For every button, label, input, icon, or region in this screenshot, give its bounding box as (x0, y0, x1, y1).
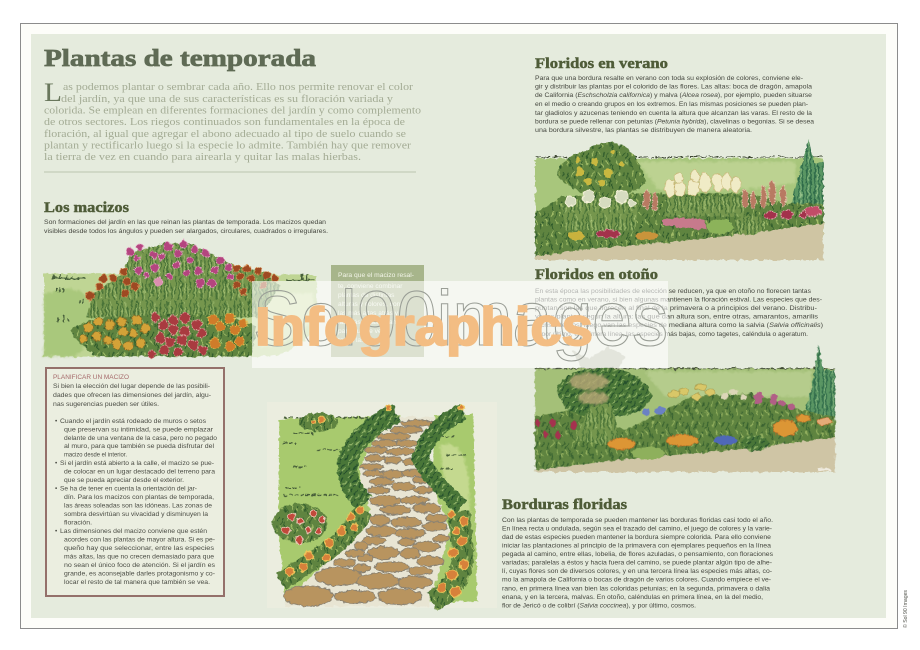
text: Borduras floridas: variadas; paralelas a éstos y hacia fuera del camino, se puede plantar algún tipo de alhe- (502, 560, 772, 566)
box: Planificar un macizo: dín. Para los macizos con plantas de temporada, (64, 494, 214, 501)
illustration: stone path (273, 405, 477, 606)
callout: green note: todas las flores. (338, 337, 384, 344)
heading: Floridos en otoño: Floridos en otoño (535, 267, 658, 283)
text: Borduras floridas: iniciar las plantaciones al principio de la primavera con ejemplares pequeños en la línea (502, 542, 771, 550)
intro text block: as podemos plantar o sembrar cada año. Ello nos permite renovar el color (63, 82, 414, 93)
callout: green note: para que se vean (338, 328, 389, 335)
callout: green note: Para que el macizo resal- (338, 272, 414, 279)
callout: green note (331, 265, 424, 357)
illustration: autumn border (535, 345, 835, 472)
text: Floridos en verano: bordura se puede rellenar con petunias ( Petunia hybrida), clavelinas o begonias. Si se desea (535, 118, 814, 126)
text: Borduras floridas: pegada al camino, entre ellas, lobelia, de flores azuladas, o pensamiento, con floraciones (502, 551, 774, 558)
watermark: Sol90images (253, 274, 668, 362)
box: Planificar un macizo: Las dimensiones del macizo conviene que estén (60, 528, 207, 535)
text: Floridos en verano: Para que una bordura resalte en verano con toda su explosión de colores, conviene ele- (535, 75, 803, 82)
box: Planificar un macizo: Se ha de tener en cuenta la orientación del jar- (60, 486, 197, 492)
text: Floridos en otoño: y crisantemos; luego van las especies de mediana altura como la salvia ( Salvia officinalis ) (535, 322, 823, 329)
intro text block: floración, al igual que agregar el abono adecuado al tipo de suelo cuando se (44, 129, 406, 140)
box: Planificar un macizo: nas sugerencias pueden ser útiles. (53, 401, 159, 408)
text: Floridos en verano: una bordura silvestre, las plantas se distribuyen de manera aleatoria. (535, 127, 752, 134)
intro text block: colorida. Se emplean en diferentes formaciones del jardín y como complemento (44, 106, 421, 116)
box: Planificar un macizo: no sean el único foco de atención. Si el jardín es (64, 562, 215, 569)
heading: Floridos en verano: Floridos en verano (535, 56, 668, 72)
intro text block: la tierra de vez en cuando para airearla y quitar las malas hierbas. (44, 152, 361, 163)
text: Los macizos (44, 219, 328, 235)
box: Planificar un macizo (46, 368, 224, 596)
box: Planificar un macizo: • (55, 418, 57, 425)
intro text block: del jardín, ya que una de sus características es su floración variada y (61, 94, 394, 105)
box: Planificar un macizo: locar el resto de tal manera que también se vea. (64, 579, 210, 586)
box: Planificar un macizo: las áreas soleadas son las idóneas. Las zonas de (64, 502, 212, 510)
intro text block: de otros sectores. Los riegos continuados son fundamentales en la época de (44, 117, 405, 128)
text: Floridos en otoño: ye las plantas según la altura: las que dan altura son, entre otras, amarantos, amarilis (535, 314, 819, 320)
box: Planificar un macizo: al muro, para que también se pueda disfrutar del (64, 443, 214, 450)
box: Planificar un macizo: floración. (64, 520, 92, 526)
drop cap: L (44, 78, 62, 107)
box heading: PLANIFICAR UN MACIZO (53, 374, 129, 381)
text: Floridos en otoño (535, 288, 823, 338)
text: Los macizos: Son formaciones del jardín en las que reinan las plantas de temporada. Los macizos quedan (44, 219, 326, 226)
illustration: flower bed (44, 240, 317, 358)
illustration: summer border (535, 138, 823, 260)
callout: green note: las más bajas delante (338, 319, 402, 326)
text: Floridos en verano: tar gladiolos y azucenas teniendo en cuenta la altura que alcanzan las varas. El resto de la (535, 110, 812, 117)
intro text block (44, 78, 421, 163)
text: Floridos en otoño: En esta época las posibilidades de elección se reducen, ya que en otoño no florecen tantas (535, 288, 812, 295)
box: Planificar un macizo: queño hay que seleccionar, entre las especies (64, 545, 214, 552)
text: Borduras floridas: enana, y en la tercera, malvas. En otoño, caléndulas en primera línea, en la del medio, (502, 594, 763, 601)
box: Planificar un macizo: Si bien la elección del lugar depende de las posibili- (53, 383, 210, 390)
box: Planificar un macizo: grande, es aconsejable darles protagonismo y co- (64, 570, 215, 578)
callout: green note: te, conviene combinar (338, 283, 403, 290)
box: Planificar un macizo: • (55, 460, 57, 467)
heading: Los macizos: Los macizos (44, 200, 129, 216)
text: Borduras floridas: Con las plantas de temporada se pueden mantener las borduras floridas casi todo el año. (502, 517, 773, 524)
box: Planificar un macizo: dades que ofrecen las dimensiones del jardín, algu- (53, 392, 211, 399)
panel: stone path backdrop (267, 402, 497, 608)
box: Planificar un macizo: • (55, 528, 57, 535)
text: Los macizos: visibles desde todos los ángulos y pueden ser alargados, circulares, cuadrados o irregulares. (44, 228, 328, 235)
text: Borduras floridas: mo la amapola de California o bocas de dragón de varios colores. Cuando empiece el ve- (502, 576, 771, 584)
callout: green note: las más altas atrás y (338, 310, 399, 317)
text: Borduras floridas: En línea recta u ondulada, según sea el trazado del camino, el juego de colores y la varie- (502, 526, 772, 532)
text: Borduras floridas: flor de Jericó o de colibrí ( Salvia coccinea), y por último, cosmos. (502, 602, 696, 610)
intro text block: plantan y rectificarlo luego si la especie lo admite. También hay que remover (44, 140, 412, 152)
text: Floridos en verano: en el medio o creando grupos en los extremos. En las mismas posiciones se pueden plan- (535, 101, 808, 108)
text: Borduras floridas: lí, cuyas flores son de diversos colores, y en una tercera línea las especies más altas, co- (502, 568, 772, 575)
box: Planificar un macizo: de colocar en un lugar destacado del terreno para (64, 468, 215, 476)
box: Planificar un macizo: Si el jardín está abierto a la calle, el macizo se pue- (60, 460, 214, 467)
box: Planificar un macizo: delante de una ventana de la casa, pero no pegado (64, 435, 217, 442)
text: Floridos en otoño: y, por último, en primera línea, las especies más bajas, como tagetes, caléndula o ageratum. (535, 331, 808, 338)
box: Planificar un macizo: • (55, 486, 57, 492)
box: Planificar un macizo: que preservan su intimidad, se puede emplazar (64, 426, 214, 434)
text: Borduras floridas (502, 517, 774, 610)
box: Planificar un macizo: que se pueda apreciar desde el exterior. (64, 477, 184, 484)
box: Planificar un macizo: más altas, las que no crecen demasiado para que (64, 554, 214, 560)
copyright: © Sol 90 Images (902, 590, 909, 628)
text: Borduras floridas: dad de estas especies pueden mantener la bordura siempre colorida. Para ello conviene (502, 534, 771, 541)
box: Planificar un macizo: macizo desde el interior. (64, 452, 127, 458)
watermark: Infographics (255, 297, 593, 357)
text: Floridos en verano (535, 75, 814, 134)
box: Planificar un macizo: acordes con las plantas de mayor altura. Si es pe- (64, 536, 215, 544)
heading: Borduras floridas: Borduras floridas (502, 497, 627, 513)
callout: green note: plantas de distintas (338, 292, 395, 299)
text: Floridos en otoño: plantas como en verano, si bien algunas mantienen la floración estival. Las especies que des- (535, 296, 822, 304)
box: Planificar un macizo: Cuando el jardín está rodeado de muros o setos (60, 418, 206, 425)
text: Floridos en verano: de California (Eschscholzia californica ) y malva (Alcea rosea), por ejemplo, pueden situarse (535, 92, 812, 99)
title: Plantas de temporada (44, 46, 316, 72)
callout: green note: alturas y colores, con (338, 301, 401, 308)
text: Borduras floridas: rano, en primera línea van bien las coloridas petunias; en la segunda, primavera o dalia (502, 586, 770, 592)
text: Floridos en otoño: puntan son las que florecen al final de la primavera o a principios del verano. Distribu- (535, 305, 817, 312)
text: Floridos en verano: gir y distribuir las plantas por el colorido de las flores. Las altas: boca de dragón, amapola (535, 84, 812, 90)
box: Planificar un macizo: sombra desvirtúan su vivacidad y disminuyen la (64, 511, 208, 518)
